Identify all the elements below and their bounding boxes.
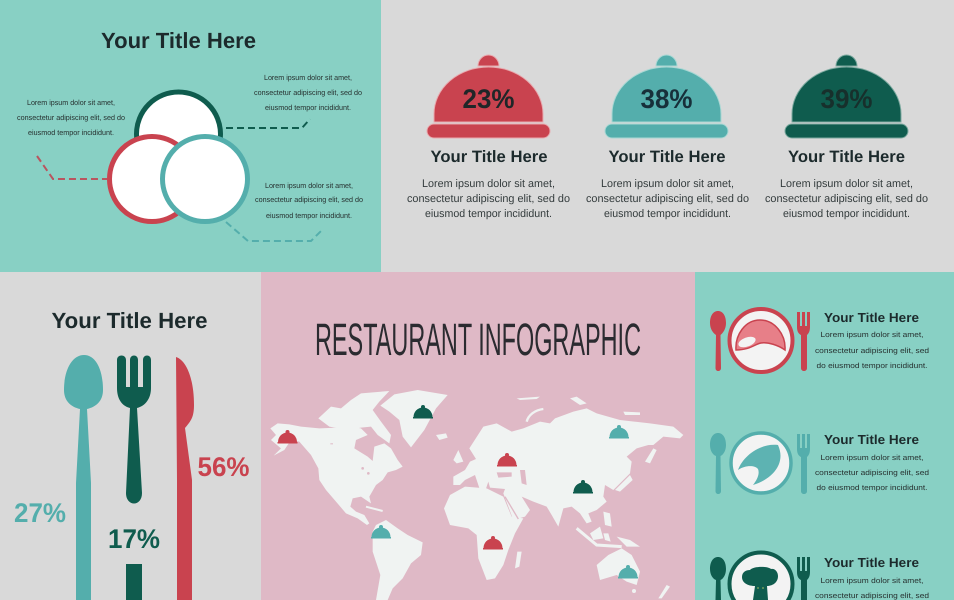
- stat: 39% cloche: Your Title Here: [788, 148, 905, 166]
- text block: plates bottom right: eiusmod tempor incididunt.: [266, 211, 352, 220]
- menu item: fish: [710, 432, 929, 494]
- menu item: fish: Lorem ipsum dolor sit amet,: [820, 453, 924, 462]
- stat: 39% cloche: 39%: [820, 84, 872, 114]
- plate: dark green: [136, 92, 220, 176]
- stat: 38% cloche: consectetur adipiscing elit, sed do: [586, 193, 749, 205]
- label: 17%: 17%: [108, 524, 160, 554]
- marker: Australia: [618, 565, 638, 578]
- icon: spoon bar: [64, 355, 103, 600]
- panel: world map background: [261, 272, 695, 600]
- icon: steak fat: [737, 335, 757, 349]
- map: Eurasia, Africa and Oceania: [444, 397, 683, 598]
- map markers: [278, 405, 638, 578]
- icon: broccoli: [742, 567, 778, 600]
- marker: South America: [371, 525, 391, 538]
- text block: plates left: consectetur adipiscing elit, sed do: [17, 113, 125, 122]
- icon: fork bar lower segment: [126, 564, 142, 600]
- stat: 23% cloche: Lorem ipsum dolor sit amet,: [422, 178, 555, 190]
- panel: cutlery background: [0, 272, 261, 600]
- text block: plates top right: consectetur adipiscing elit, sed do: [254, 88, 362, 97]
- menu item: meat: do eiusmod tempor incididunt.: [816, 361, 928, 370]
- panel: cloche stats background: [381, 0, 954, 272]
- icon: red cloche: [427, 55, 550, 138]
- stat: 23% cloche: consectetur adipiscing elit, sed do: [407, 193, 570, 205]
- menu item: meat: consectetur adipiscing elit, sed: [815, 346, 929, 355]
- stat: 39% cloche: Lorem ipsum dolor sit amet,: [780, 178, 913, 190]
- icon: knife bar: [176, 357, 194, 600]
- stat: 39% cloche: eiusmod tempor incididunt.: [783, 208, 910, 220]
- icon: red fork: [797, 312, 810, 371]
- plate: red: [110, 136, 194, 222]
- text block: plates bottom right: [255, 181, 363, 220]
- icon: dark plate: [730, 552, 792, 600]
- marker: Greenland: [413, 405, 433, 418]
- icon: red spoon: [710, 311, 726, 371]
- icon: red plate: [730, 309, 792, 372]
- menu item: broccoli: [710, 552, 929, 600]
- stat: 38% cloche: Your Title Here: [608, 148, 726, 166]
- heading: cutlery title: Your Title Here: [52, 308, 208, 333]
- stat: 23% cloche: [407, 55, 570, 220]
- menu item: broccoli: Lorem ipsum dolor sit amet,: [820, 576, 924, 585]
- icon: teal plate: [731, 433, 791, 493]
- heading: plates title: Your Title Here: [101, 28, 256, 53]
- label: 56%: 56%: [198, 452, 250, 482]
- icon: dark green cloche: [785, 55, 908, 138]
- icon: fish steak: [738, 445, 780, 485]
- text block: plates top right: eiusmod tempor incididunt.: [265, 103, 351, 112]
- icon: steak: [736, 320, 785, 350]
- marker: China: [573, 480, 593, 494]
- world map: [270, 390, 683, 600]
- menu item: meat: Lorem ipsum dolor sit amet,: [820, 330, 924, 339]
- stat: 38% cloche: eiusmod tempor incididunt.: [604, 208, 731, 220]
- connector: teal dashed line: [226, 222, 321, 241]
- marker: Russia: [609, 425, 629, 438]
- text block: plates bottom right: Lorem ipsum dolor sit amet,: [265, 181, 353, 190]
- text block: plates top right: [254, 73, 362, 112]
- stat: 38% cloche: Lorem ipsum dolor sit amet,: [601, 178, 734, 190]
- text block: plates left: [17, 98, 125, 137]
- icon: dark fork: [797, 557, 810, 600]
- icon: dark spoon: [710, 557, 726, 600]
- connector: red dashed line: [37, 156, 107, 179]
- menu item: fish: Your Title Here: [824, 432, 919, 447]
- icon: teal fork: [797, 434, 810, 494]
- stat: 39% cloche: [765, 55, 928, 220]
- marker: Africa: [483, 536, 503, 550]
- panel: plates background: [0, 0, 381, 272]
- stat: 38% cloche: 38%: [640, 84, 692, 114]
- stat: 23% cloche: Your Title Here: [430, 148, 548, 166]
- text block: plates left: Lorem ipsum dolor sit amet,: [27, 98, 115, 107]
- main title: RESTAURANT INFOGRAPHIC: [315, 314, 641, 365]
- icon: teal cloche: [605, 55, 728, 138]
- text block: plates bottom right: consectetur adipiscing elit, sed do: [255, 195, 363, 204]
- icon: teal spoon: [710, 433, 726, 494]
- menu item: fish: do eiusmod tempor incididunt.: [816, 483, 928, 492]
- menu item: fish: consectetur adipiscing elit, sed: [815, 468, 929, 477]
- panel: menu background: [695, 272, 954, 600]
- connector: dark green dashed line: [226, 119, 310, 128]
- map: Americas and Greenland: [270, 390, 448, 600]
- marker: Alaska: [278, 430, 298, 444]
- menu item: meat: [710, 309, 929, 372]
- menu item: broccoli: Your Title Here: [824, 555, 919, 570]
- stat: 23% cloche: 23%: [462, 84, 514, 114]
- item title: Your Title Here: [824, 310, 919, 325]
- menu item: broccoli: consectetur adipiscing elit, sed: [815, 591, 929, 600]
- icon: fork bar: [117, 356, 151, 504]
- plate: teal: [162, 136, 248, 222]
- stat: 38% cloche: [586, 55, 749, 220]
- marker: Europe: [497, 453, 517, 466]
- text block: plates top right: Lorem ipsum dolor sit amet,: [264, 73, 352, 82]
- overlapping plates diagram: [110, 92, 248, 222]
- label: 27%: 27%: [14, 498, 66, 528]
- stat: 39% cloche: consectetur adipiscing elit, sed do: [765, 193, 928, 205]
- stat: 23% cloche: eiusmod tempor incididunt.: [425, 208, 552, 220]
- text block: plates left: eiusmod tempor incididunt.: [28, 128, 114, 137]
